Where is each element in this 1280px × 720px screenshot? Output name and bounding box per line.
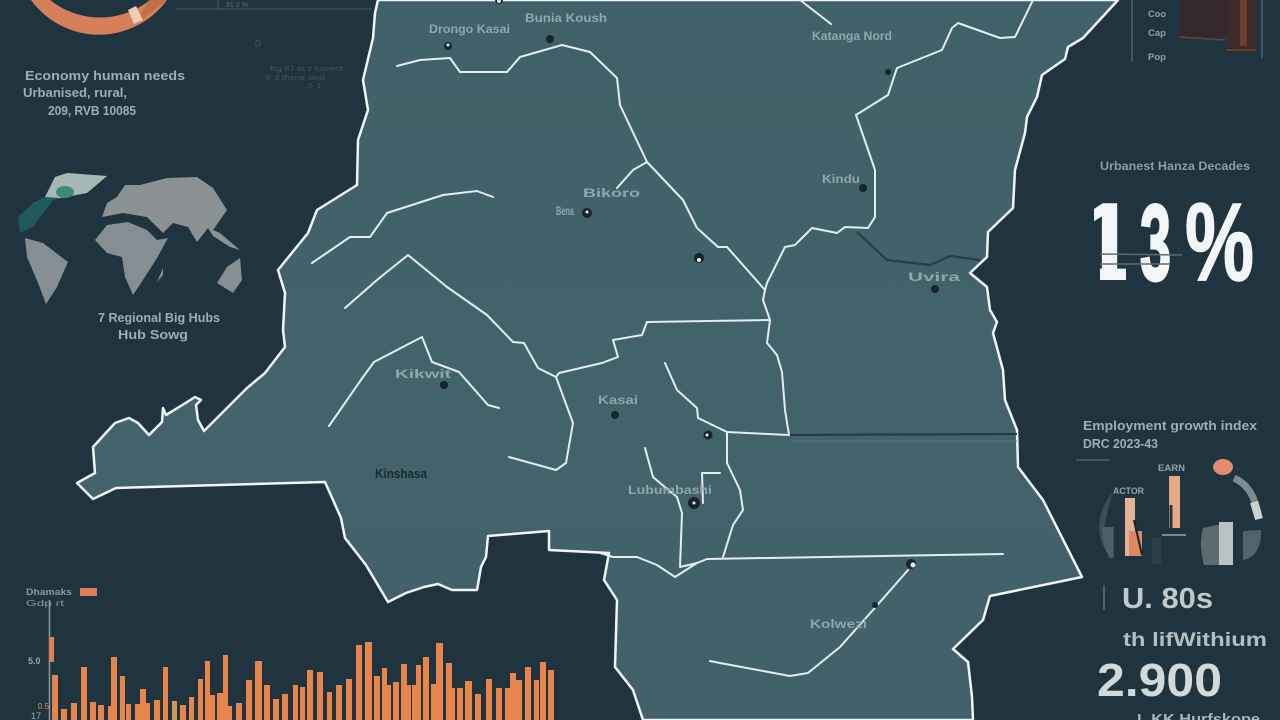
- big stat: %: [1185, 181, 1254, 304]
- icon: south america: [25, 238, 68, 304]
- map: place labels: Drongo Kasai: [429, 22, 510, 36]
- chart axis: [28, 600, 50, 720]
- text block: upper left: Urbanised, rural,: [23, 85, 127, 100]
- icon: australia: [217, 258, 242, 293]
- map: internal boundaries and rivers: [312, 0, 1033, 676]
- map: city markers: [440, 0, 939, 608]
- donut chart (cropped at top): [31, 0, 167, 35]
- big stat: 1: [1076, 180, 1138, 304]
- gauge centre: [1152, 463, 1186, 564]
- chart bars: [49, 637, 554, 720]
- stat heading: Urbanest Hanza Decades: [1100, 159, 1250, 173]
- map: place labels: Kinshasa: [375, 466, 428, 481]
- chart axis: 5.0: [28, 656, 41, 666]
- faint table fragment at top centre: 3 1: [307, 83, 322, 90]
- faint table fragment at top centre: [176, 0, 372, 90]
- chart legend: Dhamaks: [26, 587, 72, 597]
- faint table fragment at top centre: Bg 87 m z kstrent: [270, 66, 343, 73]
- icon: eurasia: [102, 177, 240, 250]
- faint table fragment at top centre: lk 3 thend stnd: [265, 75, 325, 82]
- text block: upper left: Economy human needs: [25, 68, 185, 83]
- mini chart top right: [1132, 0, 1262, 62]
- stat: 2,900: 2.900: [1097, 654, 1222, 706]
- gauge left: [1099, 486, 1144, 558]
- text block: upper left: 209, RVB 10085: [48, 103, 136, 118]
- map: place labels: Uvira: [908, 270, 961, 284]
- stat: 0.80: U. 80s: [1122, 583, 1213, 615]
- map: place labels: [375, 11, 961, 631]
- gauges and columns: [1099, 459, 1261, 565]
- chart legend: [26, 587, 97, 608]
- map: place labels: Katanga Nord: [812, 29, 892, 43]
- map: place labels: Bunia Koush: [525, 11, 607, 25]
- icon: north america: [18, 173, 107, 233]
- map: place labels: Kindu: [822, 172, 860, 186]
- mini chart top right: Pop: [1148, 52, 1167, 62]
- map: place labels: Bena: [556, 204, 574, 218]
- world map: [18, 173, 242, 304]
- text block: lower right: DRC 2023-43: [1083, 436, 1158, 451]
- faint table fragment at top centre: 81 2 %: [226, 2, 248, 9]
- icon: africa: [95, 222, 168, 295]
- text block: upper left: [23, 68, 185, 118]
- stat caption: th lifWithium: [1123, 630, 1267, 651]
- gauge left: ACTOR: [1113, 486, 1144, 496]
- map: place labels: Kolwezi: [810, 617, 867, 631]
- bar chart: [26, 587, 554, 720]
- gauge centre: EARN: [1158, 463, 1185, 473]
- chart axis: 0.5: [38, 702, 50, 711]
- text block: lower right: [1076, 418, 1258, 460]
- mini chart top right: Cap: [1148, 28, 1167, 38]
- icon: madagascar: [157, 268, 163, 282]
- mini chart top right: Coo: [1148, 9, 1167, 19]
- text block: lower right: Employment growth index: [1083, 418, 1258, 433]
- faint table fragment at top centre: 0: [255, 39, 261, 50]
- map: place labels: Kasai: [598, 393, 638, 407]
- big stat: 3: [1140, 182, 1171, 303]
- gauge right: [1201, 459, 1261, 565]
- big stat: [1094, 202, 1252, 282]
- map: place labels: Lubumbashi: [628, 483, 712, 497]
- map: place labels: Kikwit: [395, 367, 451, 381]
- world map caption: Hub Sowg: [118, 327, 188, 342]
- map: place labels: Bikoro: [583, 186, 640, 200]
- chart legend: Gdp rt: [26, 599, 65, 608]
- world map caption: [98, 310, 220, 342]
- world map caption: 7 Regional Big Hubs: [98, 310, 220, 325]
